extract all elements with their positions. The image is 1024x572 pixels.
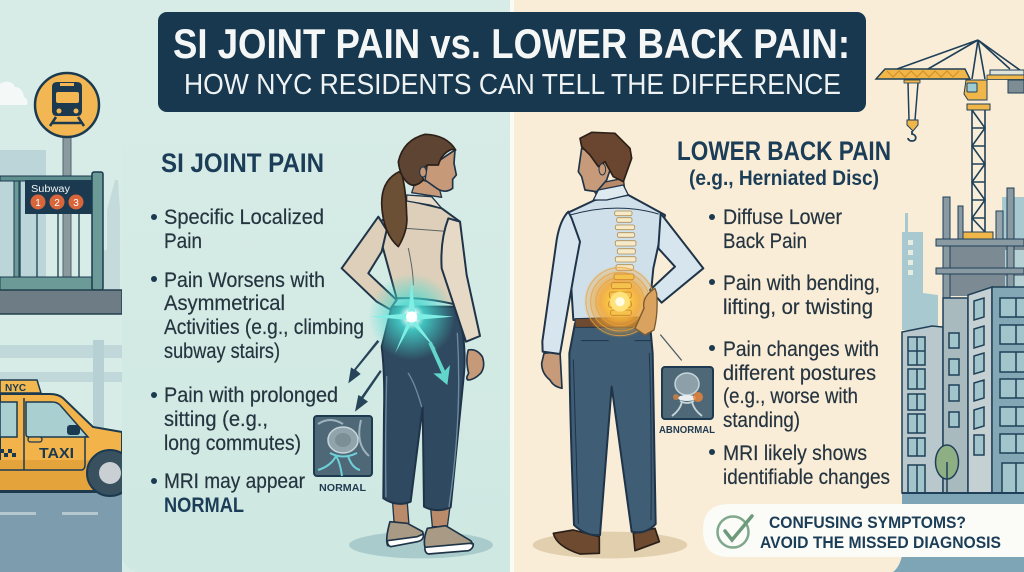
taxi: NYC (5, 383, 26, 394)
MRI label: abnormal: ABNORMAL (659, 424, 716, 436)
bullet: postures: (e.g., worse with (723, 385, 858, 408)
bullet: asymmetrical activities: Pain Worsens with (164, 269, 325, 292)
taxi: TAXI (39, 445, 74, 462)
bullet: prolonged sitting: Pain with prolonged (164, 384, 338, 407)
scene: NYC subway and taxi (0, 73, 133, 572)
right sleeve (650, 213, 703, 303)
figure: man with lower back pain (533, 132, 703, 558)
subway label: 3 (73, 198, 79, 209)
bullet: specific localized pain: Specific Localized (164, 206, 324, 229)
subway label (25, 180, 92, 214)
icon: check mark (718, 516, 752, 548)
bullet: prolonged sitting: long commutes) (164, 432, 301, 455)
icon: subway train sign (35, 73, 99, 137)
shoes (553, 528, 659, 554)
crane (876, 40, 1024, 239)
background buildings (0, 150, 122, 432)
neck (412, 178, 442, 197)
callout: confusing symptoms: AVOID THE MISSED DIAGNOSIS (760, 533, 1001, 552)
background tower (902, 213, 938, 330)
bullet: asymmetrical activities: subway stairs) (164, 340, 280, 363)
bullet: prolonged sitting: sitting (e.g., (164, 408, 268, 431)
bullet: asymmetrical activities: Asymmetrical (164, 292, 285, 315)
glow: SI joint (368, 273, 455, 360)
bullet: specific localized pain: Pain (164, 230, 202, 253)
hair (580, 132, 632, 182)
trousers (569, 323, 656, 535)
MRI thumbnail: normal (314, 416, 372, 494)
subway railing (0, 172, 103, 290)
right hand on hip (635, 288, 657, 335)
glow: lower back (584, 266, 656, 338)
bullet: asymmetrical activities (151, 269, 364, 363)
road corner (893, 550, 1024, 572)
right scene: construction site (876, 40, 1024, 572)
bullet: bending and lifting: lifting, or twisting (723, 296, 873, 319)
shirt (567, 195, 665, 320)
arrow: teal pain radiating (428, 342, 450, 385)
buildings (902, 287, 1024, 493)
taxi (0, 380, 133, 496)
bullet: MRI normal (151, 470, 305, 517)
subway label: Subway (31, 184, 70, 195)
arrows: dark referred pain (348, 340, 382, 412)
callout: confusing symptoms (703, 504, 1024, 557)
left sleeve (342, 217, 397, 309)
bullet: diffuse pain: Back Pain (723, 230, 807, 253)
MRI thumbnail: abnormal (659, 367, 716, 436)
bullet: diffuse pain (709, 206, 842, 253)
heading: lower back pain: LOWER BACK PAIN (677, 136, 891, 166)
subway label: 2 (54, 198, 60, 209)
divider (510, 0, 514, 572)
left sleeve (542, 212, 580, 354)
heading: SI joint pain: SI JOINT PAIN (161, 148, 324, 178)
right sleeve (441, 218, 480, 342)
platform (0, 290, 122, 314)
cloud (0, 82, 27, 105)
belt (575, 317, 652, 327)
bullet: diffuse pain: Diffuse Lower (723, 206, 842, 229)
ponytail (382, 172, 407, 247)
ear (599, 164, 606, 175)
bullet: postures (709, 338, 879, 432)
trousers (382, 307, 465, 510)
tree (936, 445, 958, 493)
callout text: CONFUSING SYMPTOMS? (769, 513, 966, 532)
subway sign pole (63, 135, 71, 290)
bullet: bending and lifting (709, 272, 880, 319)
bullet: asymmetrical activities: Activities (e.g., climbing (164, 316, 364, 339)
bullet: MRI changes (709, 442, 890, 489)
title line 2: HOW NYC RESIDENTS CAN TELL THE DIFFERENCE (184, 69, 841, 101)
ground shadow (533, 532, 687, 558)
right hand (467, 350, 484, 380)
bullet: postures: different postures (723, 362, 876, 385)
ear (420, 167, 426, 177)
title banner (158, 12, 866, 112)
subheading: herniated disc: (e.g., Herniated Disc) (689, 167, 879, 190)
bullet: postures: standing) (723, 409, 800, 432)
bullet: MRI normal: NORMAL (164, 494, 244, 517)
panel: SI joint pain (122, 60, 510, 572)
road (0, 491, 122, 572)
hair (398, 134, 456, 185)
ankles (393, 503, 450, 527)
neck (590, 178, 625, 195)
bullet: postures: Pain changes with (723, 338, 879, 361)
face (425, 150, 456, 191)
bullet: specific localized pain (151, 206, 324, 253)
MRI label: normal: NORMAL (319, 482, 367, 494)
bullet: prolonged sitting (151, 384, 338, 455)
panel: lower back pain text (677, 136, 891, 489)
subway label: 1 (35, 198, 41, 209)
bullet: MRI changes: identifiable changes (723, 466, 890, 489)
collar (407, 195, 442, 208)
callout line (661, 335, 681, 360)
spine (615, 211, 636, 270)
title line 1: SI JOINT PAIN vs. LOWER BACK PAIN: (173, 20, 850, 67)
panel: left background (0, 0, 510, 572)
figure: woman with SI joint pain (342, 134, 493, 558)
face (578, 148, 613, 192)
bullet: MRI normal: MRI may appear (164, 470, 305, 493)
ground (902, 493, 1024, 507)
left hand (542, 352, 562, 388)
bullet: MRI changes: MRI likely shows (723, 442, 867, 465)
shoes (387, 522, 473, 554)
bullet: bending and lifting: Pain with bending, (723, 272, 880, 295)
ground shadow (349, 532, 493, 558)
collar (593, 185, 628, 200)
panel: right background (510, 0, 1024, 572)
shirt (377, 200, 464, 307)
building frame under construction (936, 188, 1024, 302)
